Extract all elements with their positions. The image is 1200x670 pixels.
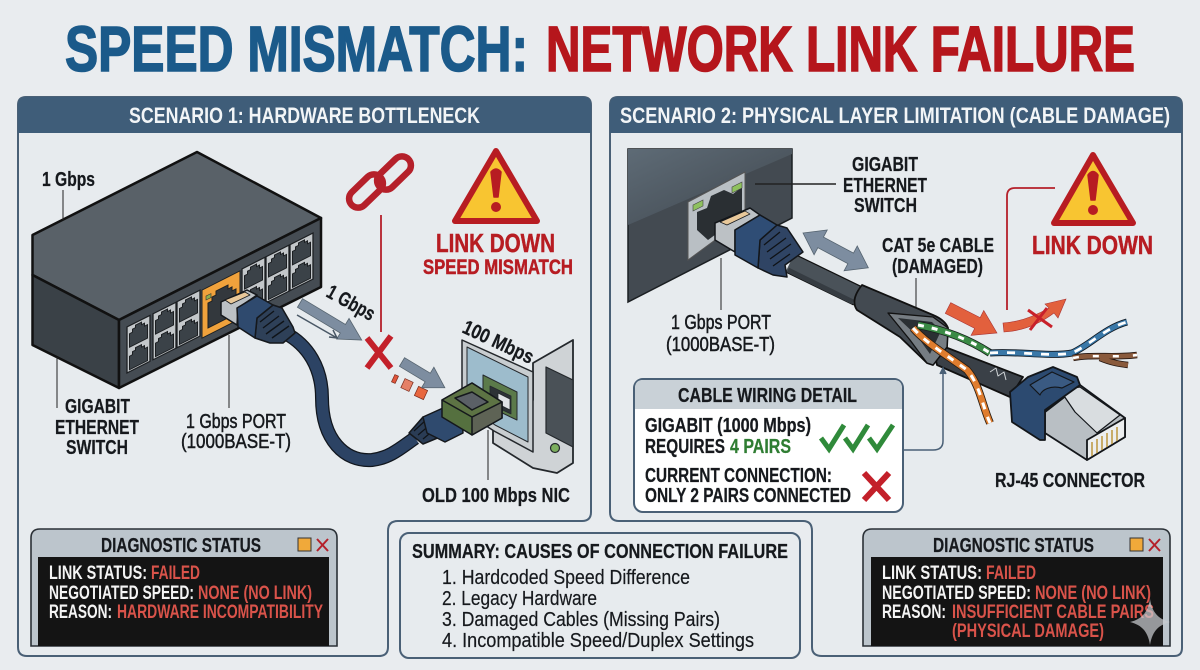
window screen (871, 557, 1163, 646)
status text: FAILED (151, 563, 200, 584)
window frame (31, 529, 337, 646)
icon: broken chain (345, 153, 415, 211)
summary list: 3. Damaged Cables (Missing Pairs) (442, 608, 720, 631)
current connection (645, 465, 851, 507)
title: SPEED MISMATCH: (65, 13, 528, 85)
status text (882, 563, 1154, 642)
label: 100 Mbps: 100 Mbps (459, 317, 537, 369)
status text: LINK STATUS: (49, 563, 147, 584)
panel 1 heading: SCENARIO 1: HARDWARE BOTTLENECK (129, 103, 480, 128)
label: gigabit ethernet switch: SWITCH (854, 195, 917, 217)
label: gigabit ethernet switch: ETHERNET (843, 175, 927, 197)
warning sign (455, 151, 537, 221)
leader: 1 Gbps: 1 Gbps (42, 169, 95, 191)
damaged cable jacket (788, 263, 1023, 397)
arrow: signal in (942, 296, 1003, 345)
switch close-up (628, 149, 792, 302)
arrow: 1 Gbps flow (294, 281, 379, 350)
gigabit requirement: GIGABIT (1000 Mbps) (645, 415, 811, 437)
icon: red X (864, 473, 889, 500)
window title: DIAGNOSTIC STATUS (101, 535, 261, 557)
label: gigabit ethernet switch (755, 154, 927, 217)
callout title: CABLE WIRING DETAIL (678, 385, 857, 407)
switch illustration (32, 152, 321, 388)
status text: HARDWARE INCOMPATIBILITY (117, 602, 323, 623)
status text: LINK STATUS: (882, 563, 982, 584)
panel 1 header (18, 97, 591, 133)
panel: scenario 1 (18, 97, 591, 656)
label: 1 Gbps port: 1 Gbps PORT (186, 411, 286, 433)
link down label: LINK DOWN (1032, 230, 1153, 260)
label: gigabit ethernet switch: GIGABIT (852, 154, 918, 176)
label: 1 Gbps port (666, 258, 775, 356)
status text: NONE (NO LINK) (198, 583, 312, 604)
arrow: reduced flow (396, 352, 451, 398)
RJ-45 connector (1010, 367, 1125, 460)
port plate (688, 172, 745, 260)
window frame (863, 529, 1170, 646)
title (65, 13, 1135, 85)
label: cat 5e cable: (DAMAGED) (892, 256, 983, 278)
label: RJ-45 connector: RJ-45 CONNECTOR (995, 470, 1145, 492)
window buttons (1130, 538, 1160, 551)
summary box (400, 533, 800, 658)
label: 1 Gbps port: (1000BASE-T) (666, 334, 775, 356)
panel 2 header (610, 97, 1182, 133)
current connection: ONLY 2 PAIRS CONNECTED (645, 485, 851, 507)
red leader line (1007, 188, 1055, 310)
callout: cable wiring detail (634, 379, 903, 512)
summary heading: SUMMARY: CAUSES OF CONNECTION FAILURE (412, 541, 788, 563)
twisted wires (913, 322, 1137, 423)
link down label (423, 228, 573, 279)
watermark sparkle (1130, 599, 1170, 645)
plug at switch (221, 290, 295, 343)
dropped packets (391, 375, 428, 400)
label: gigabit ethernet switch: ETHERNET (55, 417, 139, 439)
status text: (PHYSICAL DAMAGE) (952, 621, 1104, 642)
current connection: CURRENT CONNECTION: (645, 465, 832, 487)
icon: red X (367, 336, 391, 368)
plug at switch close-up (715, 208, 803, 277)
window screen (38, 557, 329, 646)
status text: NEGOTIATED SPEED: (49, 583, 194, 604)
red connector line (380, 215, 382, 332)
plug at NIC (409, 383, 502, 444)
panel 2 frame (610, 97, 1182, 656)
label: 1 Gbps port (181, 335, 291, 453)
warning sign (1054, 155, 1133, 223)
label: cat 5e cable: CAT 5e CABLE (882, 235, 994, 257)
link down label: SPEED MISMATCH (423, 256, 573, 279)
summary list: 2. Legacy Hardware (442, 587, 597, 610)
summary list: 4. Incompatible Speed/Duplex Settings (442, 629, 754, 652)
label: gigabit ethernet switch: GIGABIT (65, 396, 130, 418)
link down label: LINK DOWN (436, 228, 555, 258)
window buttons (298, 538, 328, 551)
label: cat 5e cable (882, 235, 994, 307)
diagnostic window 1 (31, 529, 337, 646)
label: gigabit ethernet switch (55, 357, 139, 459)
arrow: blocked signal (1003, 299, 1066, 332)
double arrow (796, 221, 875, 280)
status text: NEGOTIATED SPEED: (882, 583, 1031, 604)
diagnostic window 2 (863, 529, 1170, 646)
gigabit requirement: REQUIRES (645, 436, 725, 458)
panel: scenario 2 (610, 97, 1182, 656)
label: old NIC: OLD 100 Mbps NIC (422, 485, 570, 507)
status text: REASON: (49, 602, 112, 623)
status text: NONE (NO LINK) (1035, 583, 1151, 604)
icon: check marks (821, 425, 893, 449)
panel 1 frame (18, 97, 591, 656)
gigabit requirement: 4 PAIRS (730, 436, 791, 458)
connector line to wiring detail (904, 368, 946, 450)
status text (49, 563, 323, 623)
leader: 1 Gbps (42, 169, 95, 220)
label: 1 Gbps port: 1 Gbps PORT (671, 312, 771, 334)
status text: REASON: (882, 602, 946, 623)
summary list (442, 566, 754, 652)
gigabit requirement (645, 415, 811, 458)
label: 1 Gbps port: (1000BASE-T) (181, 431, 291, 453)
callout header (635, 380, 902, 409)
status text: FAILED (986, 563, 1036, 584)
window title: DIAGNOSTIC STATUS (933, 535, 1094, 557)
summary list: 1. Hardcoded Speed Difference (442, 566, 690, 589)
ethernet cable (285, 333, 415, 460)
label: gigabit ethernet switch: SWITCH (66, 437, 128, 459)
arrow: 1 Gbps flow: 1 Gbps (323, 281, 379, 326)
old pc with NIC (462, 340, 573, 473)
switch ports (127, 233, 313, 376)
